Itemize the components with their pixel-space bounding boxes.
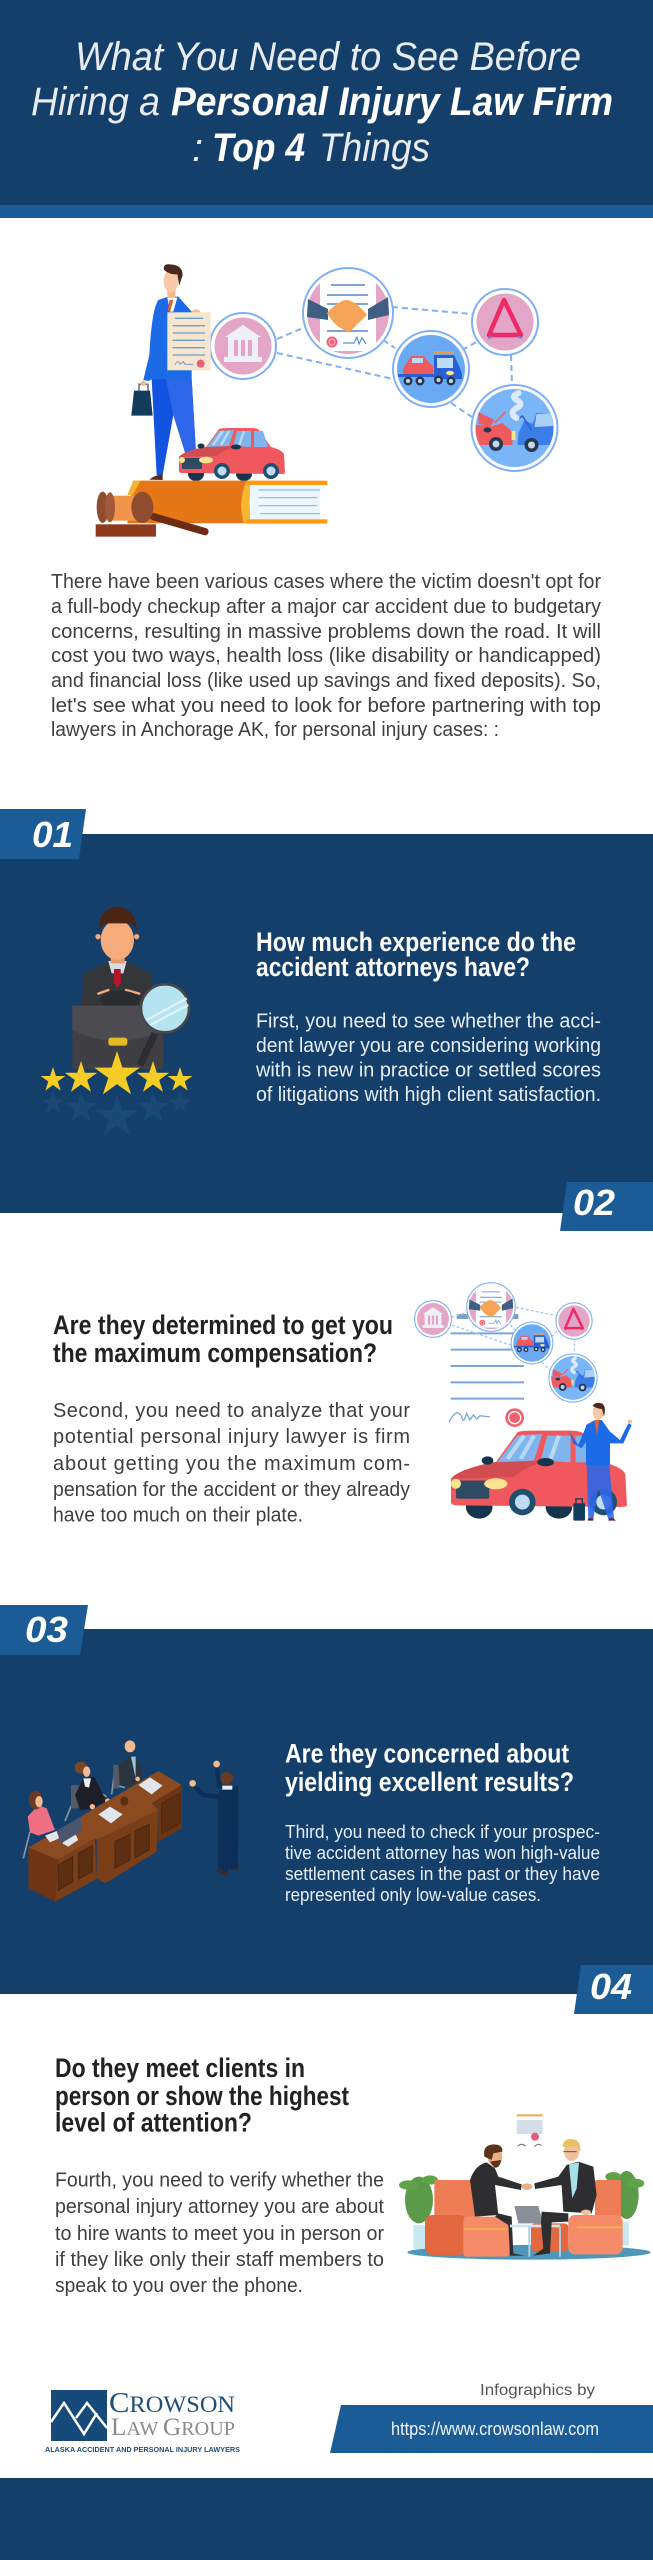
body text 01: with is new in practice or settled scores xyxy=(255,1060,601,1082)
heading 03: Are they concerned about xyxy=(285,1738,569,1768)
intro paragraph: There have been various cases where the victim doesn't opt for xyxy=(51,571,601,593)
number tag 02: 02 xyxy=(573,1182,615,1223)
body text 02: pensation for the accident or they already xyxy=(53,1479,410,1501)
certificate xyxy=(517,2114,543,2147)
heading 02: Are they determined to get you xyxy=(53,1310,393,1340)
star reflections xyxy=(42,1091,191,1136)
intro paragraph: lawyers in Anchorage AK, for personal injury cases: : xyxy=(51,719,499,741)
large red car xyxy=(451,1431,627,1519)
logo mark xyxy=(51,2390,107,2441)
book and gavel xyxy=(96,481,327,537)
red car xyxy=(179,428,285,481)
heading 03: yielding excellent results? xyxy=(285,1767,574,1797)
footer band xyxy=(0,2478,653,2560)
body text 01: First, you need to see whether the acci- xyxy=(256,1010,601,1032)
number tag 03: 03 xyxy=(25,1609,68,1650)
heading 02: the maximum compensation? xyxy=(53,1338,377,1368)
title xyxy=(31,35,613,170)
heading 04 xyxy=(55,2053,349,2138)
logo wordmark xyxy=(109,2387,235,2441)
body text 04: speak to you over the phone. xyxy=(55,2275,303,2297)
heading 02 xyxy=(53,1310,393,1368)
body text 04: personal injury attorney you are about xyxy=(55,2196,384,2218)
body text 02: have too much on their plate. xyxy=(53,1504,303,1526)
icon: car crash xyxy=(472,385,558,471)
five gold stars xyxy=(41,1051,192,1094)
icon: handshake small xyxy=(467,1283,515,1331)
intro paragraph: and financial loss (like used up savings and fixed deposits). So, xyxy=(51,670,601,692)
hero illustration xyxy=(96,264,557,537)
businessman left xyxy=(470,2144,532,2256)
icon: bank xyxy=(210,313,276,379)
title: Personal Injury Law Firm xyxy=(171,80,613,124)
wooden bench xyxy=(28,1771,182,1902)
body text 01: of litigations with high client satisfaction. xyxy=(256,1084,601,1106)
body text 02: about getting you the maximum com- xyxy=(53,1453,410,1475)
icon: tow truck xyxy=(393,331,469,407)
title: : xyxy=(192,126,203,170)
panel: step 03 xyxy=(0,1605,653,1994)
panel: step 04 xyxy=(55,1965,653,2297)
body text 03: represented only low-value cases. xyxy=(285,1884,541,1905)
intro paragraph xyxy=(51,571,601,741)
body text 01 xyxy=(255,1010,601,1106)
body text 03: tive accident attorney has won high-value xyxy=(285,1842,600,1863)
icon: triangle small xyxy=(556,1303,592,1339)
heading 01 xyxy=(256,927,576,982)
title: What You Need to See Before xyxy=(75,35,581,79)
icon: lawyer with briefcase and stars xyxy=(72,907,189,1069)
businessman right xyxy=(533,2139,623,2256)
body text 03: Third, you need to check if your prospec- xyxy=(285,1821,600,1842)
icon: handshake agreement xyxy=(303,268,393,358)
title: Top 4 xyxy=(212,126,305,170)
url banner xyxy=(330,2405,653,2453)
number tag 04: 04 xyxy=(590,1966,632,2007)
body text 02 xyxy=(53,1400,410,1526)
number tag 04 xyxy=(574,1965,653,2014)
body text 01: dent lawyer you are considering working xyxy=(256,1035,601,1057)
logo wordmark: CROWSON xyxy=(109,2387,235,2419)
panel: step 02 xyxy=(53,1182,653,1526)
intro paragraph: a full-body checkup after a major car accident due to budgetary xyxy=(51,596,601,618)
document lines and seal xyxy=(449,1307,575,1427)
heading 04: Do they meet clients in xyxy=(55,2053,305,2083)
body text 04: if they like only their staff members to xyxy=(55,2249,384,2271)
logo tagline: ALASKA ACCIDENT AND PERSONAL INJURY LAWYERS xyxy=(45,2445,240,2454)
number tag 02 xyxy=(560,1182,653,1231)
connector lines xyxy=(277,307,512,417)
body text 04: Fourth, you need to verify whether the xyxy=(55,2170,384,2192)
heading 03 xyxy=(285,1738,574,1797)
number tag 01: 01 xyxy=(32,814,73,855)
intro paragraph: let's see what you need to look for before partnering with top xyxy=(51,695,601,717)
panel: step 01 xyxy=(0,809,653,1213)
heading 01: accident attorneys have? xyxy=(256,952,530,982)
intro paragraph: cost you two ways, health loss (like disability or handicapped) xyxy=(51,645,601,667)
number tag 03 xyxy=(0,1605,88,1655)
illustration: client meeting handshake xyxy=(399,2114,651,2260)
icon: tow truck small xyxy=(511,1322,553,1364)
body text 04 xyxy=(55,2170,384,2297)
header banner xyxy=(0,0,653,218)
body text 02: potential personal injury lawyer is firm xyxy=(53,1426,410,1448)
laptop and table xyxy=(510,2206,560,2257)
title: Hiring a xyxy=(31,80,160,124)
body text 03: settlement cases in the past or they have xyxy=(285,1863,600,1884)
intro paragraph: concerns, resulting in massive problems down the road. It will xyxy=(51,621,601,643)
heading 04: level of attention? xyxy=(55,2108,252,2138)
logo wordmark: LAW GROUP xyxy=(111,2414,235,2441)
heading 01: How much experience do the xyxy=(256,927,576,957)
standing attorney xyxy=(189,1761,238,1877)
body text 02: Second, you need to analyze that your xyxy=(53,1400,410,1422)
icon: warning triangle xyxy=(472,289,538,355)
body text 04: to hire wants to meet you in person or xyxy=(55,2223,384,2245)
title: Things xyxy=(319,126,430,170)
lawyer beside car xyxy=(569,1403,632,1521)
papers and monitor xyxy=(45,1777,163,1847)
illustration: document, car and lawyer xyxy=(415,1283,632,1521)
illustration: courtroom bench xyxy=(23,1740,238,1902)
body text 03 xyxy=(285,1821,600,1905)
heading 04: person or show the highest xyxy=(55,2081,349,2111)
icon: crash small xyxy=(549,1354,597,1402)
number tag 01 xyxy=(0,809,86,859)
credit line: Infographics by xyxy=(480,2382,595,2399)
armchairs xyxy=(425,2180,621,2257)
icon: bank small xyxy=(415,1301,451,1337)
plants xyxy=(399,2171,644,2249)
logo: Crowson Law Group xyxy=(45,2387,240,2454)
seated panel xyxy=(23,1740,143,1858)
lawyer holding document xyxy=(131,264,211,480)
url banner: https://www.crowsonlaw.com xyxy=(391,2419,599,2439)
